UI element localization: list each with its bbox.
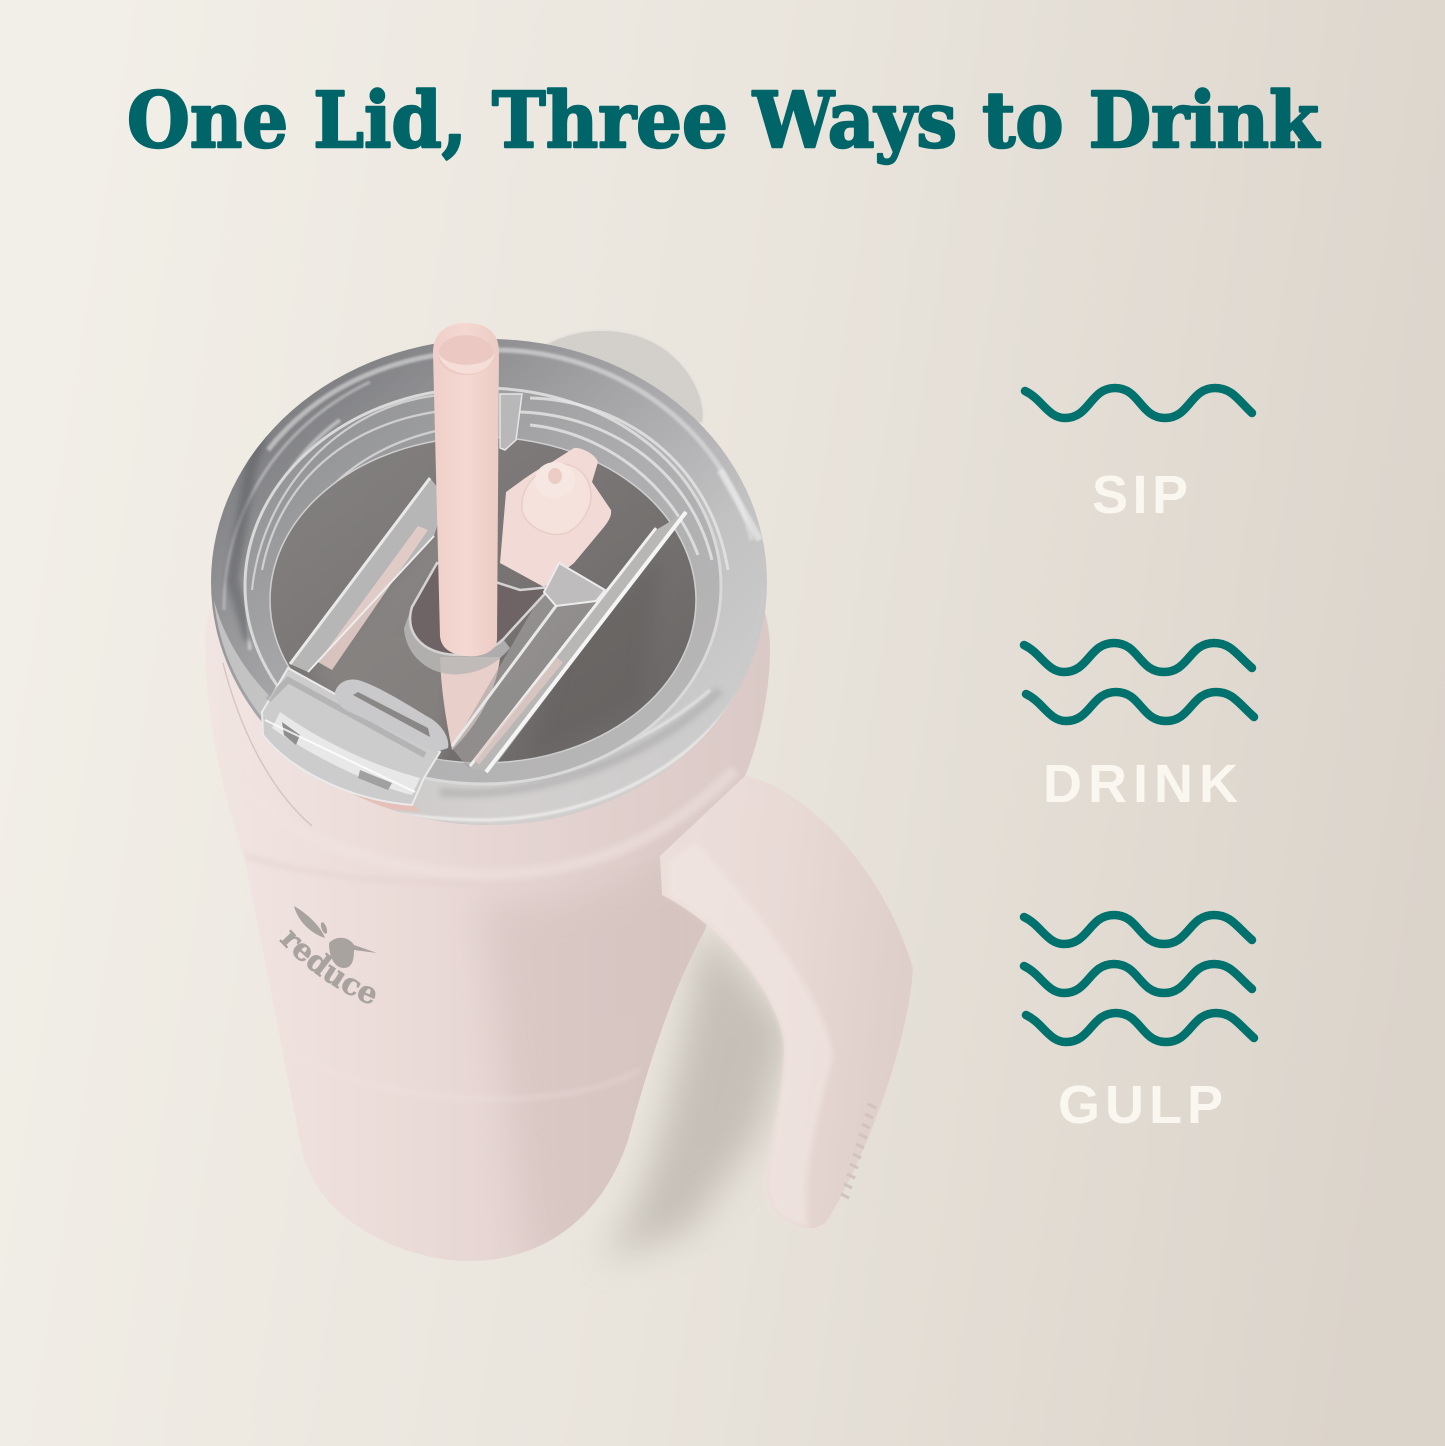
title: One Lid, Three Ways to Drink — [127, 76, 1321, 166]
straw — [433, 323, 499, 656]
tumbler shadow — [600, 925, 790, 1262]
lid — [211, 323, 767, 825]
lid tab — [540, 330, 704, 424]
logo mark — [294, 906, 377, 968]
silicone stopper — [500, 448, 611, 587]
straw opening — [404, 563, 551, 674]
drinking well — [270, 437, 696, 763]
lid inner wall — [245, 388, 721, 784]
flap sip slot — [335, 680, 448, 752]
tumbler product image — [211, 323, 913, 1261]
left rail — [290, 478, 446, 672]
front flap — [262, 668, 448, 805]
tumbler body — [205, 590, 770, 1261]
gulp wave icon — [1024, 915, 1254, 1042]
logo wordmark: reduce — [279, 930, 376, 1004]
lid lower band — [214, 575, 766, 825]
handle engraved mark — [841, 1104, 876, 1198]
pink collar seen through lid — [354, 794, 420, 812]
sip wave icon — [1025, 388, 1252, 418]
straw reflection — [440, 657, 500, 750]
right rail — [452, 512, 686, 772]
lid outer rim — [211, 339, 767, 825]
body shading — [223, 663, 735, 1270]
stopper clip — [544, 563, 605, 606]
logo — [279, 906, 376, 1004]
label: sip: SIP — [1092, 465, 1188, 525]
label: gulp: GULP — [1058, 1075, 1223, 1135]
handle — [660, 776, 913, 1228]
drink wave icon — [1024, 643, 1254, 721]
label: drink: DRINK — [1043, 754, 1238, 814]
top channel — [500, 394, 522, 450]
